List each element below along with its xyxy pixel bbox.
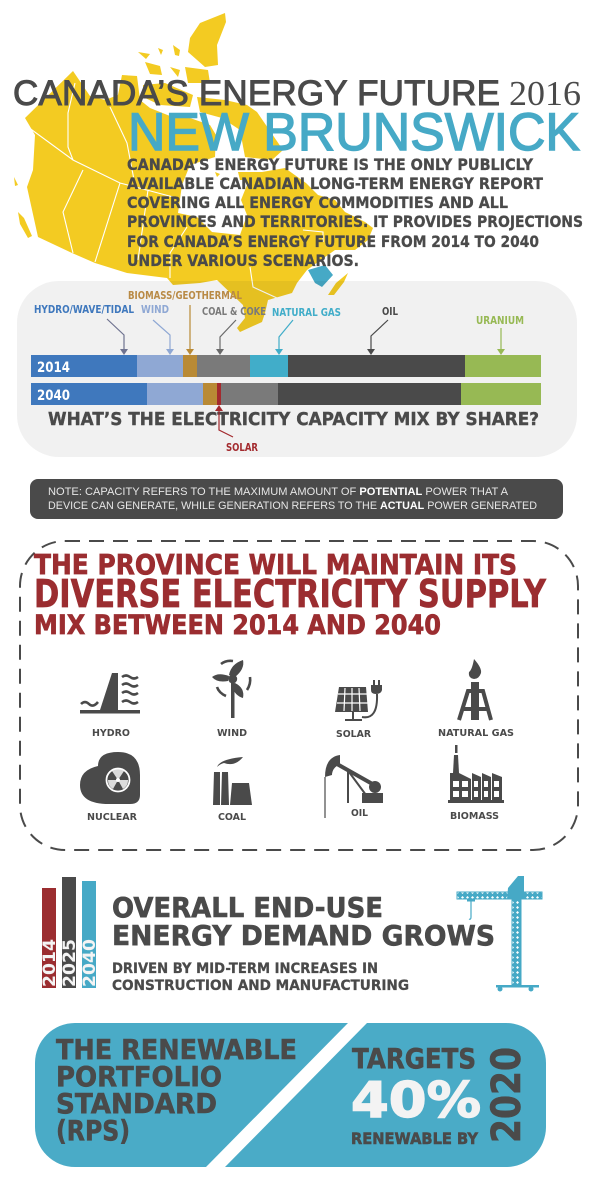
icon: hydro — [80, 673, 140, 739]
40 percent target — [351, 1042, 530, 1148]
icon: natural gas — [438, 659, 514, 739]
new brunswick highlight — [308, 265, 333, 287]
note box — [30, 479, 563, 519]
icon: coal: COAL — [218, 812, 247, 823]
heading: end-use demand: OVERALL END-USE — [112, 891, 383, 924]
RPS heading: (RPS) — [56, 1114, 130, 1147]
source labels: URANIUM — [476, 315, 524, 327]
source labels: COAL & COKE — [202, 306, 266, 318]
bar: 2014: 2014 — [37, 360, 70, 376]
bar chart: end-use demand by year: 2025 — [60, 939, 80, 987]
bar chart: end-use demand by year — [40, 877, 100, 988]
source labels — [34, 290, 524, 327]
note box: NOTE: CAPACITY REFERS TO THE MAXIMUM AMOUNT OF POTENTIAL POWER THAT A — [48, 486, 509, 498]
icon: solar — [335, 680, 382, 740]
source labels: NATURAL GAS — [272, 307, 341, 319]
40 percent target: 2020 — [484, 1047, 530, 1143]
sub-text: demand drivers — [112, 961, 409, 994]
title: 2016 — [509, 74, 581, 113]
sub-text: demand drivers: DRIVEN BY MID-TERM INCREASES IN — [112, 961, 378, 977]
intro paragraph: FOR CANADA’S ENERGY FUTURE FROM 2014 TO 2040 — [127, 232, 539, 251]
icon: wind — [212, 660, 250, 739]
title: CANADA’S ENERGY FUTURE — [13, 74, 500, 113]
source labels: BIOMASS/GEOTHERMAL — [128, 290, 242, 302]
heading — [34, 548, 546, 641]
note box: DEVICE CAN GENERATE, WHILE GENERATION REFERS TO THE ACTUAL POWER GENERATED — [48, 500, 537, 512]
diagonal divider — [206, 1023, 367, 1167]
source labels: WIND — [141, 304, 169, 316]
heading: MIX BETWEEN 2014 AND 2040 — [34, 610, 441, 641]
icon: solar: SOLAR — [336, 729, 371, 740]
label arrows — [107, 305, 505, 355]
heading: end-use demand — [112, 891, 495, 952]
icon: nuclear: NUCLEAR — [87, 812, 137, 823]
icon: natural gas: NATURAL GAS — [438, 728, 514, 739]
source labels: HYDRO/WAVE/TIDAL — [34, 304, 134, 316]
heading: THE PROVINCE WILL MAINTAIN ITS — [34, 548, 517, 581]
40 percent target: 40% — [351, 1072, 481, 1129]
intro paragraph: CANADA’S ENERGY FUTURE IS THE ONLY PUBLICLY — [127, 155, 533, 174]
RPS heading: PORTFOLIO — [56, 1060, 222, 1093]
RPS heading: STANDARD — [56, 1087, 217, 1120]
panel: diverse supply mix — [20, 541, 578, 850]
icon: biomass factory — [448, 745, 504, 822]
icon: hydro: HYDRO — [92, 728, 130, 739]
panel: renewable portfolio standard — [35, 1023, 546, 1167]
icon: biomass factory: BIOMASS — [450, 811, 499, 822]
bar: 2040: 2040 — [37, 388, 70, 404]
intro paragraph: COVERING ALL ENERGY COMMODITIES AND ALL — [127, 193, 508, 212]
panel: electricity capacity mix — [17, 281, 577, 457]
subtitle: New Brunswick: NEW BRUNSWICK — [128, 103, 580, 162]
source labels: OIL — [382, 306, 398, 318]
intro paragraph: AVAILABLE CANADIAN LONG-TERM ENERGY REPORT — [127, 174, 543, 193]
icon: oil pump: OIL — [351, 808, 369, 819]
bar: 2040 — [31, 383, 541, 405]
bar chart: end-use demand by year: 2014 — [40, 939, 60, 987]
solar arrow and label — [215, 405, 258, 454]
icon: oil pump — [325, 755, 383, 819]
solar arrow and label: SOLAR — [226, 442, 258, 454]
heading: end-use demand: ENERGY DEMAND GROWS — [112, 919, 495, 952]
icon: construction crane — [457, 876, 542, 992]
40 percent target: RENEWABLE BY — [351, 1129, 478, 1148]
RPS heading — [56, 1033, 297, 1147]
intro paragraph — [127, 155, 583, 270]
chart question heading: WHAT’S THE ELECTRICITY CAPACITY MIX BY SHARE? — [48, 409, 539, 430]
bar: 2014 — [31, 355, 541, 377]
40 percent target: TARGETS — [352, 1042, 476, 1075]
sub-text: demand drivers: CONSTRUCTION AND MANUFACTURING — [112, 978, 409, 994]
icon: coal — [213, 757, 252, 823]
intro paragraph: UNDER VARIOUS SCENARIOS. — [127, 251, 359, 270]
RPS heading: THE RENEWABLE — [56, 1033, 297, 1066]
icon: nuclear — [80, 752, 140, 823]
map of Canada — [14, 13, 373, 332]
icon: wind: WIND — [217, 728, 247, 739]
bar chart: end-use demand by year: 2040 — [80, 939, 100, 987]
